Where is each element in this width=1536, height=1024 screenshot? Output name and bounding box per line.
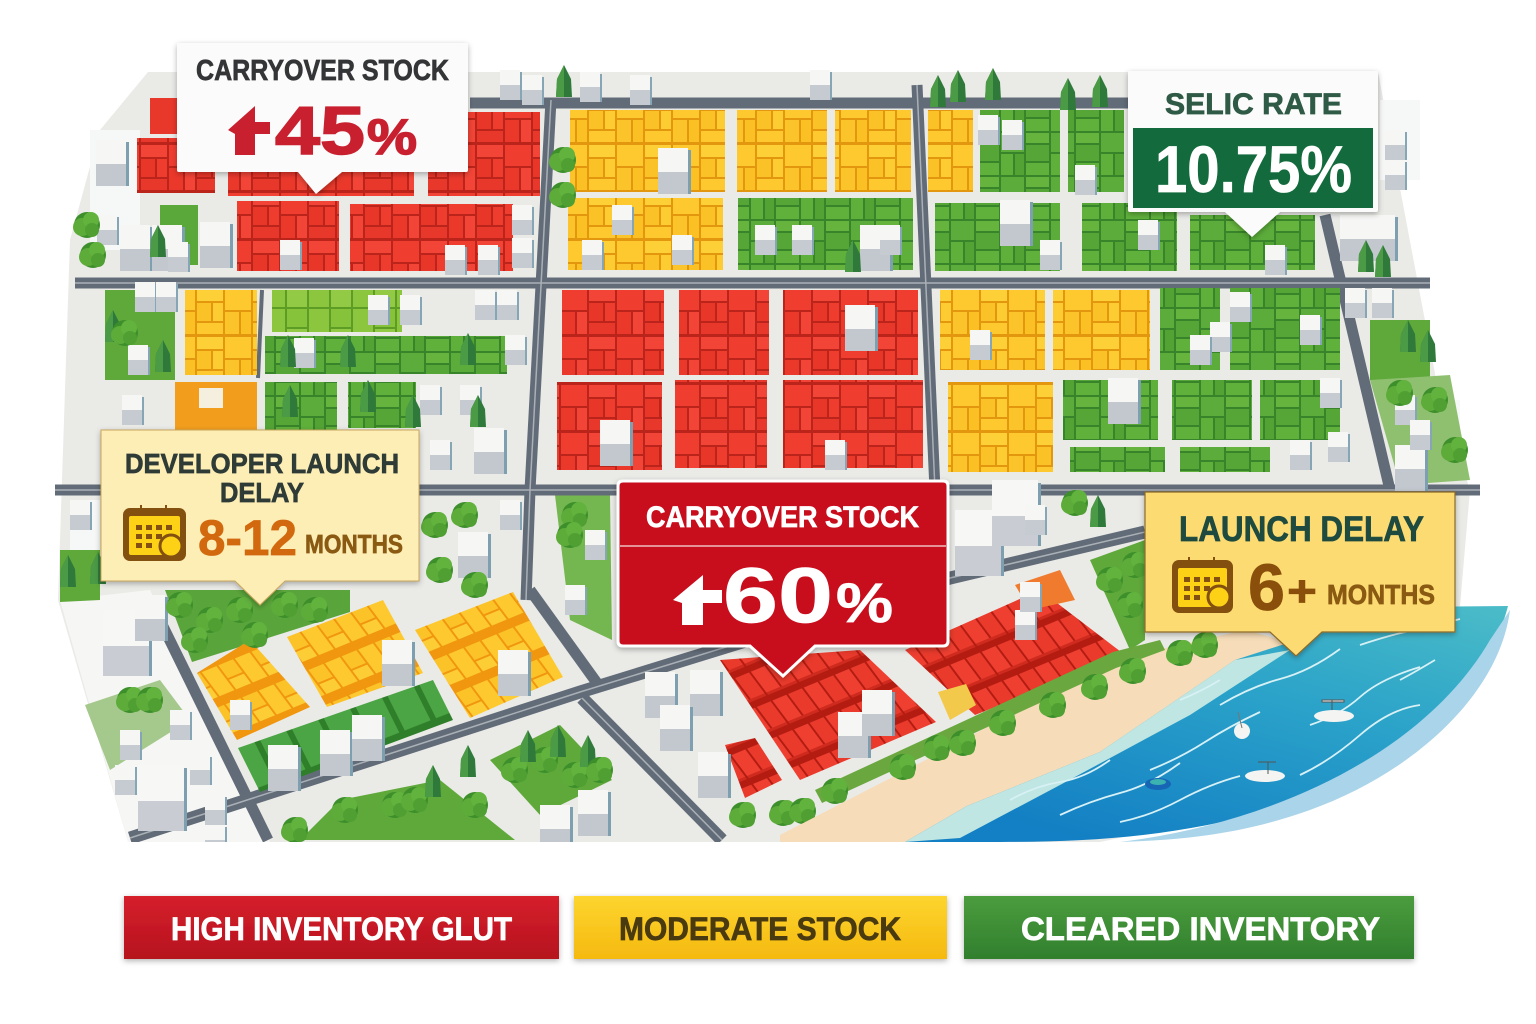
roads [55,85,1480,840]
icon: up arrow [673,575,722,625]
heading: DEVELOPER LAUNCH [125,448,399,479]
value: 8-12 [198,510,297,566]
grass strip [815,640,1165,803]
heading: SELIC RATE [1165,88,1342,121]
beach trees [821,632,1218,804]
ground [58,72,1470,842]
heading: CARRYOVER STOCK [646,501,919,534]
legend: high inventory glut [124,896,559,959]
heading: CARRYOVER STOCK [196,55,449,87]
legend: moderate stock [574,896,947,959]
value: 45 [275,93,365,169]
legend: high inventory glut: HIGH INVENTORY GLUT [171,911,512,947]
callout: carryover stock 60%: % [836,571,893,634]
icon: up arrow [228,106,270,155]
callout: launch delay [1145,492,1455,656]
white buildings [70,70,1432,855]
value: 10.75% [1155,132,1352,206]
cleared inventory blocks [160,110,1340,792]
value: 60 [723,551,833,639]
legend [124,896,1414,959]
trees [60,65,1468,843]
city map [55,65,1510,855]
callout: selic rate [1128,71,1378,237]
legend: cleared inventory: CLEARED INVENTORY [1021,911,1380,947]
icon: calendar [123,505,186,561]
callout: carryover stock 45% [177,43,468,194]
high inventory blocks [137,98,1125,798]
icon: calendar [1172,557,1233,613]
callout: carryover stock 60% [618,481,948,676]
legend: moderate stock: MODERATE STOCK [619,911,901,947]
boats [1145,700,1354,790]
value panel [1133,128,1373,208]
callout: launch delay: MONTHS [1327,579,1435,610]
callout: developer launch delay: DELAY [220,477,304,508]
callout: developer launch delay [101,430,419,605]
value: 6 [1248,550,1285,624]
legend: cleared inventory [964,896,1414,959]
green lots [60,290,1470,840]
callout: developer launch delay: MONTHS [305,529,403,559]
sea [905,606,1510,842]
callout: carryover stock 45%: % [367,109,417,165]
heading: LAUNCH DELAY [1179,510,1424,549]
moderate stock blocks [175,110,1150,740]
callout: launch delay: + [1287,567,1317,616]
beach [780,630,1300,842]
